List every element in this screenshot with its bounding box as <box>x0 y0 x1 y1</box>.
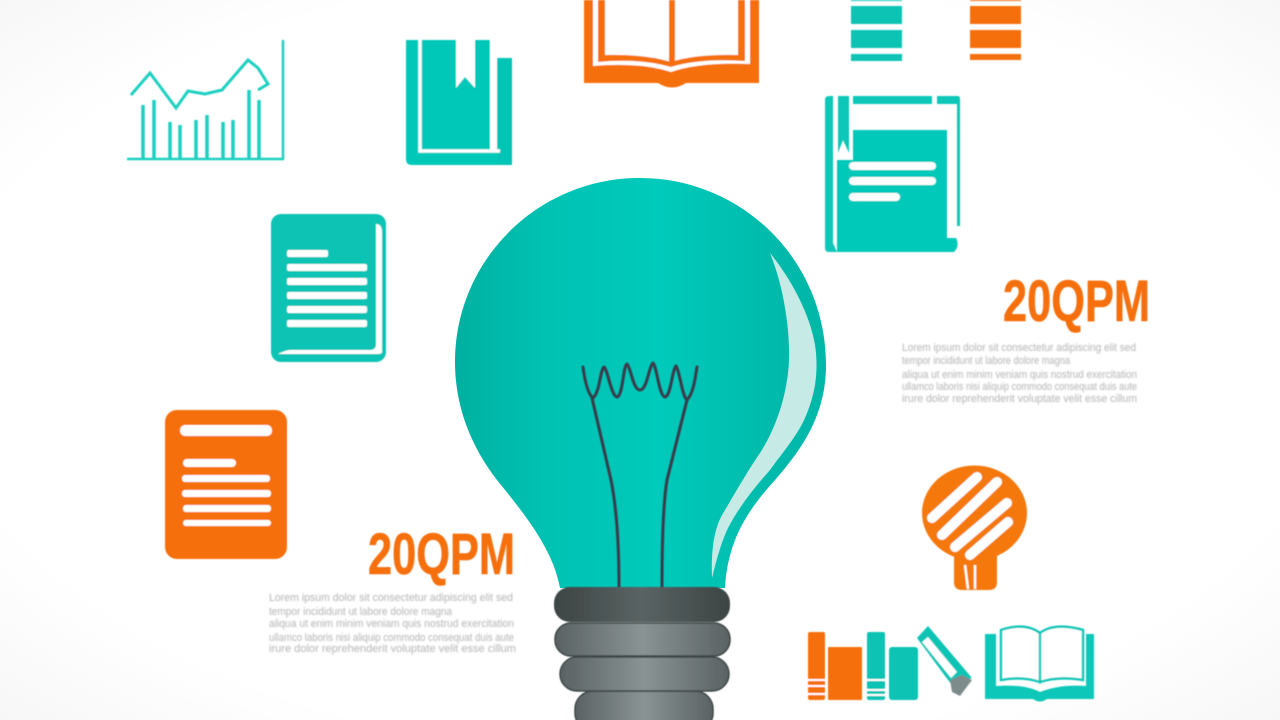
icon: teal open book <box>985 627 1094 702</box>
heading: right time label: 20QPM <box>1003 269 1150 334</box>
bulb glass <box>455 178 826 588</box>
icon: teal notebook <box>825 96 960 252</box>
text block: right description: irure dolor reprehenderit voluptate velit esse cillum <box>902 393 1137 405</box>
icon: teal document <box>271 214 386 362</box>
glass highlight <box>712 253 817 578</box>
text block: right description <box>902 342 1137 405</box>
text block: right description: Lorem ipsum dolor sit consectetur adipiscing elit sed <box>902 342 1136 354</box>
text block: left description: Lorem ipsum dolor sit consectetur adipiscing elit sed <box>269 592 513 604</box>
filament <box>583 363 697 587</box>
central light bulb <box>455 178 826 720</box>
text block: right description: aliqua ut enim minim veniam quis nostrud exercitation <box>902 369 1137 381</box>
icon: books and pencil row <box>808 626 972 700</box>
text block: left description: tempor incididunt ut labore dolore magna <box>269 606 453 618</box>
text block: left description: ullamco laboris nisi aliquip commodo consequat duis aute <box>269 632 514 644</box>
text block: left description: irure dolor reprehenderit voluptate velit esse cillum <box>269 643 516 655</box>
icon: open orange book <box>584 0 759 88</box>
text block: right description: ullamco laboris nisi aliquip commodo consequat duis aute <box>902 381 1137 393</box>
heading: left time label: 20QPM <box>368 522 515 587</box>
icon: orange document <box>165 410 287 559</box>
text block: left description <box>269 592 516 655</box>
icon: orange stack <box>970 0 1021 60</box>
text block: left description: aliqua ut enim minim veniam quis nostrud exercitation <box>269 618 514 630</box>
icon: teal stack <box>851 0 902 61</box>
screw base <box>554 587 730 720</box>
text block: right description: tempor incididunt ut labore dolore magna <box>902 355 1071 367</box>
icon: line and bar chart <box>127 40 284 160</box>
icon: bookmarked book <box>406 40 512 165</box>
icon: small orange bulb <box>922 466 1027 590</box>
